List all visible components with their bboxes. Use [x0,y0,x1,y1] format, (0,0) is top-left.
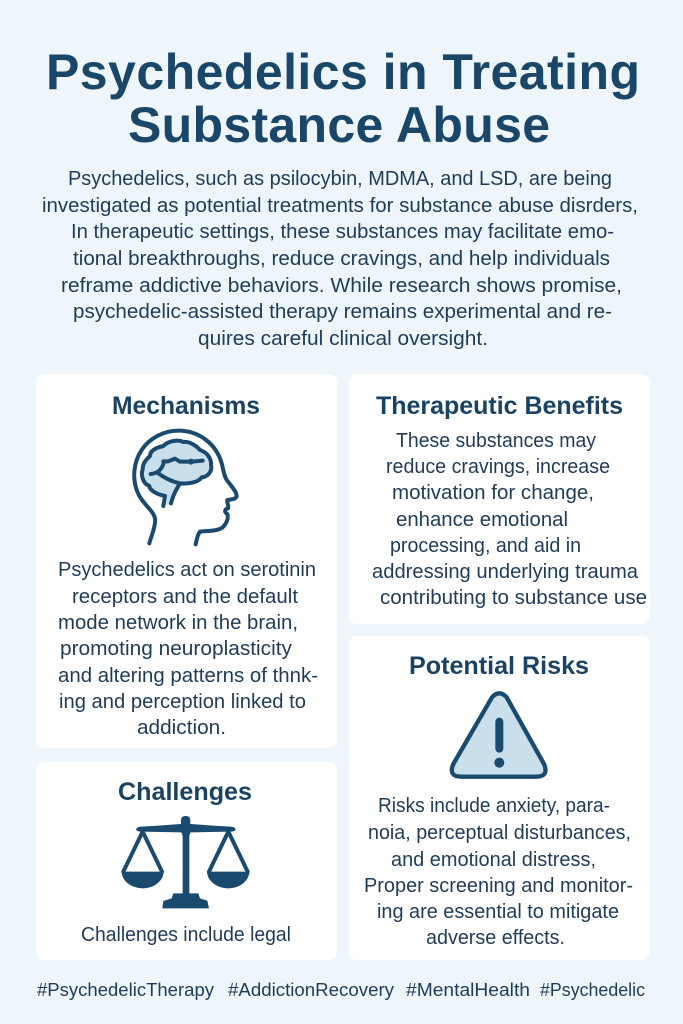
text: therapeutic benefits body: motivation for change, [392,482,594,504]
intro paragraph: psychedelic-assisted therapy remains experimental and re- [73,301,612,323]
hashtags: #AddictionRecovery [228,980,394,1000]
intro paragraph: tional breakthroughs, reduce cravings, and help individuals [73,248,610,270]
panel: challenges [36,762,337,960]
text: potential risks body: adverse effects. [426,927,565,949]
hashtags: #Psychedelic [540,980,645,1000]
panel: potential risks [349,636,650,960]
text: therapeutic benefits body: contributing to substance use [380,587,647,609]
intro paragraph: Psychedelics, such as psilocybin, MDMA, and LSD, are being [68,168,612,190]
text: potential risks body: noia, perceptual disturbances, [368,822,631,844]
intro paragraph: quires careful clinical oversight. [198,328,488,350]
heading: therapeutic benefits: Therapeutic Benefits [376,392,623,420]
title: Substance Abuse [128,97,550,153]
intro paragraph: investigated as potential treatments for substance abuse disrders, [42,195,638,217]
panel: therapeutic benefits [349,374,650,624]
text: mechanisms body [58,559,318,739]
intro paragraph: In therapeutic settings, these substances may facilitate emo- [71,221,614,243]
text: potential risks body: Proper screening and monitor- [364,875,633,897]
text: mechanisms body: and altering patterns of thnk- [58,665,318,687]
heading: potential risks: Potential Risks [409,652,589,680]
text: potential risks body: Risks include anxiety, para- [378,795,610,817]
panel: mechanisms [36,374,337,748]
text: therapeutic benefits body: processing, and aid in [390,535,581,557]
icon: warning triangle [452,693,546,777]
heading: mechanisms: Mechanisms [112,392,260,420]
text: mechanisms body: ing and perception linked to [59,691,306,713]
text: therapeutic benefits body: These substances may [396,430,596,452]
text: therapeutic benefits body: reduce cravings, increase [386,456,610,478]
text: mechanisms body: promoting neuroplasticity [60,638,292,660]
text: potential risks body: ing are essential to mitigate [377,901,619,923]
text: mechanisms body: Psychedelics act on serotinin [58,559,316,581]
heading: challenges: Challenges [118,778,252,806]
text: mechanisms body: addiction. [137,717,226,739]
title [46,44,640,153]
hashtags: #MentalHealth [406,980,530,1000]
text: mechanisms body: receptors and the default [72,586,298,608]
title: Psychedelics in Treating [46,44,640,100]
text: potential risks body [364,795,633,949]
hashtags [37,980,645,1000]
intro paragraph: reframe addictive behaviors. While research shows promise, [61,275,622,297]
icon: balance scale [122,816,249,908]
icon: head with brain [134,431,237,544]
text: potential risks body: and emotional distress, [391,849,596,871]
text: therapeutic benefits body: addressing underlying trauma [372,561,639,583]
text: therapeutic benefits body [372,430,647,609]
text: challenges body: Challenges include legal [81,924,291,946]
text: therapeutic benefits body: enhance emotional [396,509,568,531]
text: mechanisms body: mode network in the brain, [58,612,298,634]
hashtags: #PsychedelicTherapy [37,980,214,1000]
intro paragraph [42,168,638,350]
